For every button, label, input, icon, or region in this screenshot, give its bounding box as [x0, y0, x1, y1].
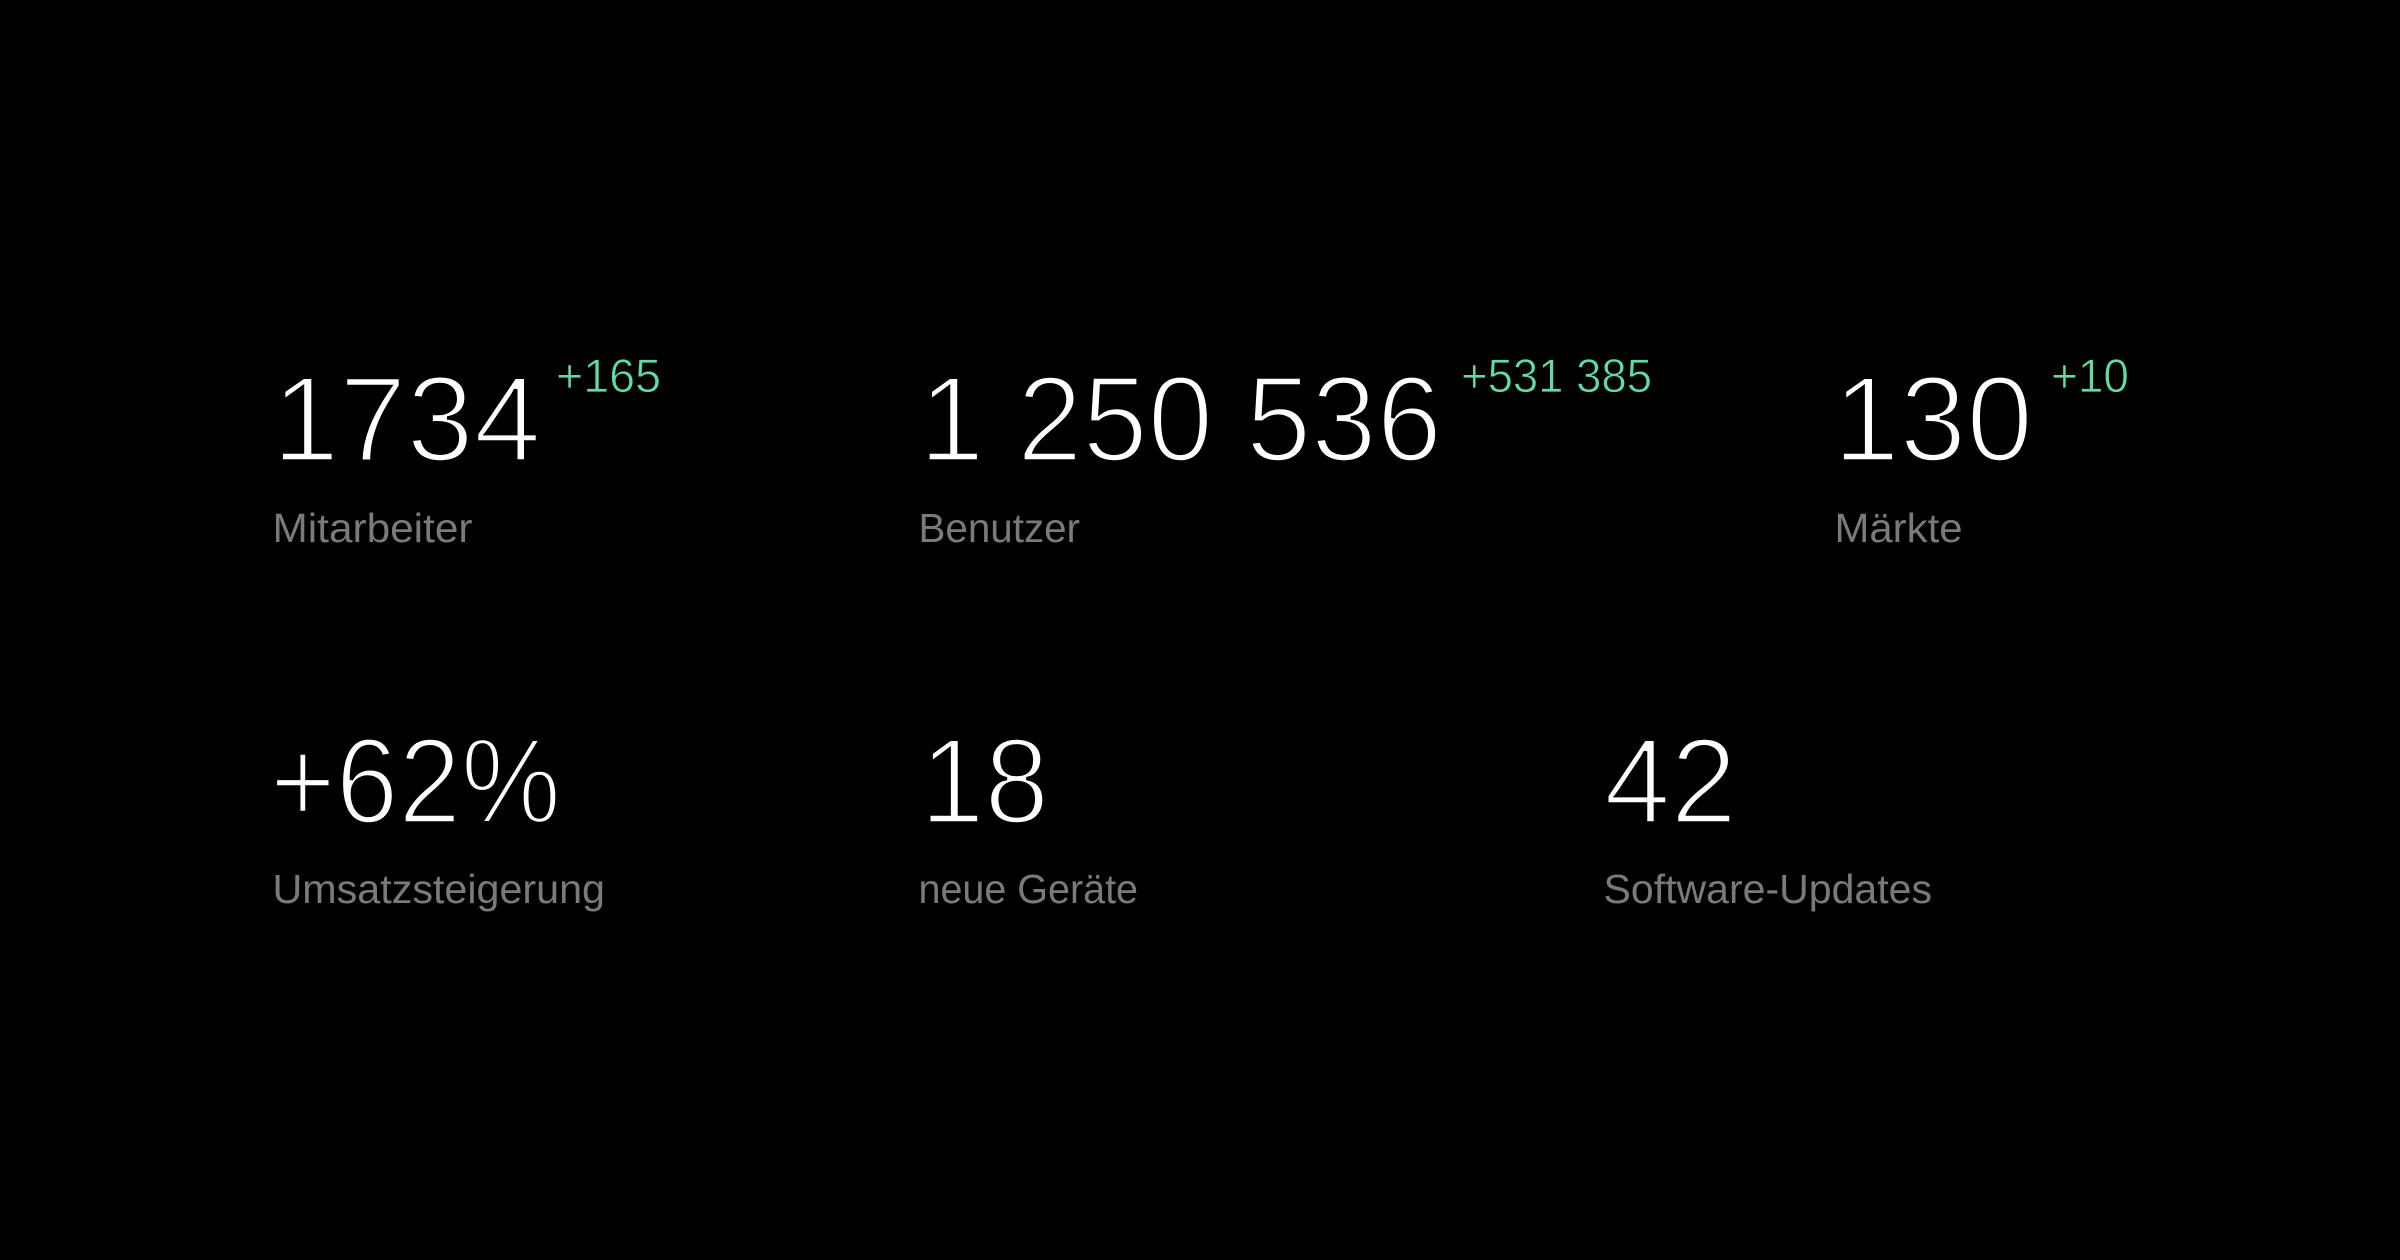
delta: +531 385 — [1461, 349, 1652, 402]
delta: +165 — [556, 349, 661, 402]
value: 130 — [1833, 351, 2033, 487]
value: 1734 — [272, 351, 541, 487]
value: +62% — [270, 713, 561, 849]
label: Benutzer — [918, 505, 1080, 551]
stat: Software-Updates — [1604, 713, 1932, 912]
value: 42 — [1604, 713, 1737, 849]
label: Software-Updates — [1604, 866, 1932, 912]
delta: +10 — [2051, 349, 2129, 402]
stat: Märkte — [1833, 349, 2129, 551]
label: neue Geräte — [918, 866, 1138, 912]
stat: Benutzer — [918, 349, 1652, 551]
label: Umsatzsteigerung — [272, 866, 605, 912]
label: Märkte — [1834, 505, 1962, 551]
stat: Mitarbeiter — [272, 349, 661, 551]
stat: Umsatzsteigerung — [270, 713, 605, 912]
value: 18 — [920, 713, 1049, 849]
value: 1 250 536 — [919, 351, 1442, 487]
label: Mitarbeiter — [272, 505, 472, 551]
stat: neue Geräte — [918, 713, 1138, 912]
